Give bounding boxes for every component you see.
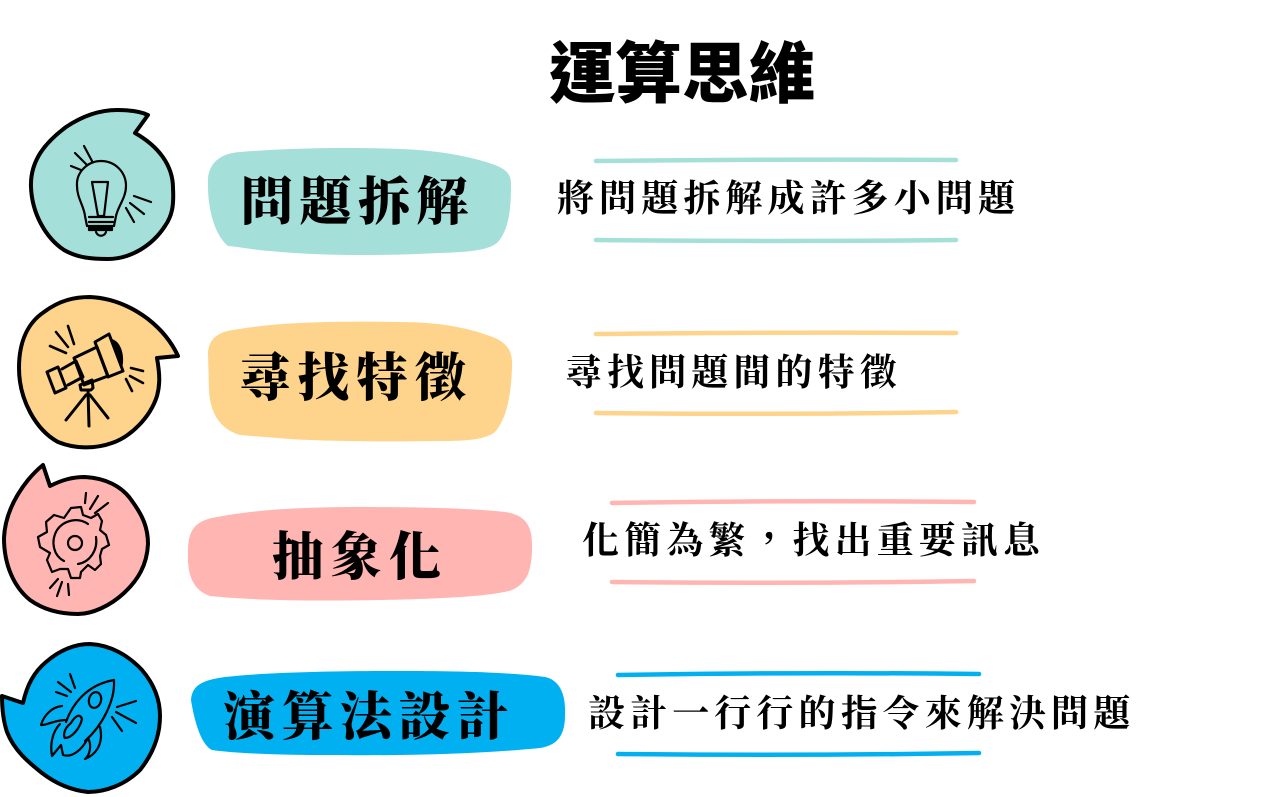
label pill: 演算法設計: 演算法設計 [223, 689, 515, 747]
description: 尋找問題間的特徵: 尋找問題間的特徵 [565, 352, 902, 394]
label pill: 尋找特徵 [208, 322, 512, 441]
description: 將問題拆解成許多小問題: 將問題拆解成許多小問題 [557, 178, 1020, 220]
description: 設計一行行的指令來解決問題: 設計一行行的指令來解決問題 [588, 693, 1135, 735]
panel: pattern recognition [19, 297, 956, 447]
description: 化簡為繁，找出重要訊息: 化簡為繁，找出重要訊息 [582, 520, 1045, 562]
panel: algorithm design [2, 644, 1135, 792]
label pill: 抽象化: 抽象化 [272, 529, 447, 587]
label pill: 抽象化 [188, 507, 532, 601]
label pill: 問題拆解: 問題拆解 [241, 174, 475, 232]
panel: abstraction [4, 465, 1045, 614]
icon: rocket speech bubble [2, 644, 160, 792]
title: 運算思維 [549, 38, 815, 112]
icon: light bulb speech bubble [31, 110, 173, 259]
icon: telescope speech bubble [19, 297, 178, 447]
label pill: 演算法設計 [191, 671, 565, 755]
label pill: 問題拆解 [208, 148, 511, 255]
panel: problem decomposition [31, 110, 1020, 259]
icon: gear speech bubble [4, 465, 148, 614]
label pill: 尋找特徵: 尋找特徵 [239, 350, 473, 408]
